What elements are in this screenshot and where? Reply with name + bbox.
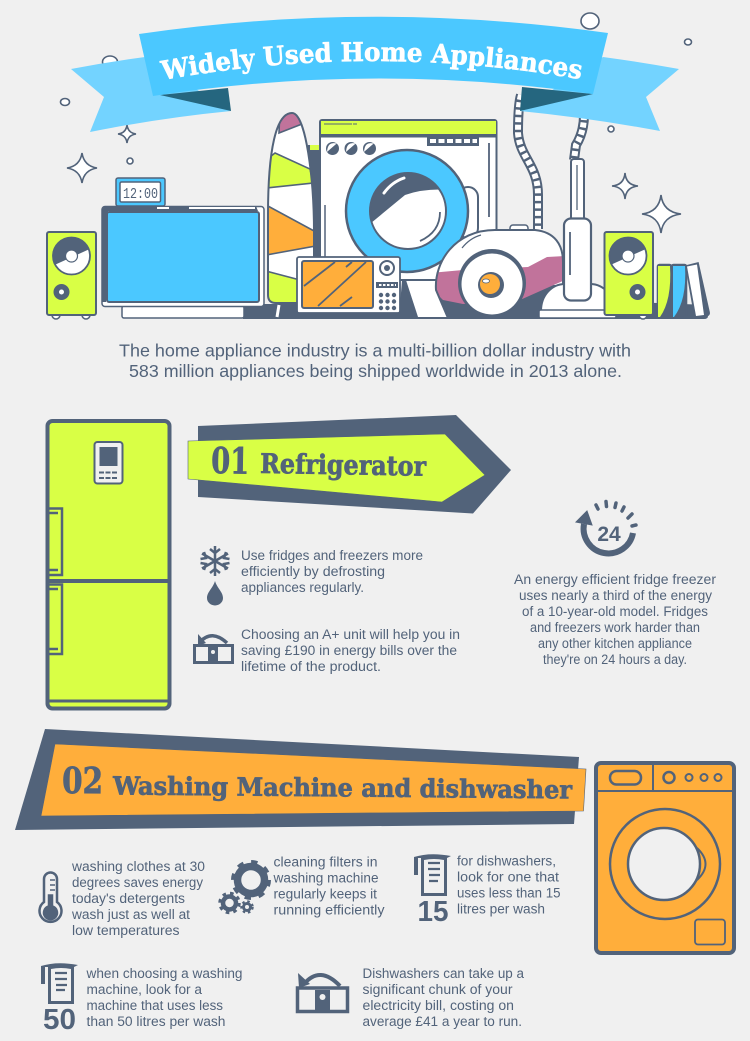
tip: washing at 30 degrees: low temperatures (72, 923, 180, 938)
tip: dishwasher electricity cost: Dishwashers can take up a (362, 966, 524, 981)
tip: washing at 30 degrees (71, 859, 205, 938)
fridge energy text: uses nearly a third of the energy (519, 588, 712, 603)
books (658, 263, 709, 318)
icon: snowflake (200, 546, 230, 576)
icon: 24 hours: 24 (597, 523, 621, 546)
icon: thermometer (40, 872, 62, 922)
icon: jug 50 litres: 50 (43, 1004, 76, 1036)
tip: dishwasher 15 litres (457, 854, 560, 916)
tip: cleaning filters: regularly keeps it (274, 886, 377, 902)
fridge tip: A+ unit: saving £190 in energy bills over the (241, 643, 457, 658)
section 02 title: 02 (62, 760, 103, 802)
fridge handles (49, 508, 62, 654)
section 01 heading ribbon (188, 415, 511, 514)
ironing board (266, 108, 322, 317)
left speaker (47, 232, 96, 319)
tip: cleaning filters: washing machine (272, 870, 378, 886)
fridge energy text (514, 572, 717, 667)
intro text: 583 million appliances being shipped worldwide in 2013 alone. (129, 361, 622, 381)
title text: Widely Used Home Appliances (159, 42, 582, 80)
fridge energy text: they're on 24 hours a day. (543, 652, 687, 667)
icon: jug 50 litres (41, 963, 78, 1036)
tip: dishwasher 15 litres: for dishwashers, (457, 854, 556, 868)
microwave (297, 257, 400, 313)
alarm clock (116, 178, 165, 206)
washing machine illustration (596, 763, 734, 953)
tip: cleaning filters: cleaning filters in (274, 854, 378, 870)
icon: money saving (194, 634, 232, 662)
icon: jug 15 litres (414, 854, 451, 928)
fridge display (94, 442, 122, 484)
icon: 24 hours (576, 502, 636, 553)
tip: washing machine 50 litres: machine that uses less (86, 998, 223, 1013)
vacuum cleaner (434, 224, 563, 317)
section 02 title: Washing Machine and dishwasher (112, 771, 573, 804)
tip: cleaning filters: running efficiently (274, 902, 385, 918)
fridge tip: defrost (241, 548, 423, 595)
fridge energy text: An energy efficient fridge freezer (514, 572, 717, 587)
fridge tip: defrost: efficiently by defrosting (241, 564, 385, 579)
fridge energy text: of a 10-year-old model. Fridges (522, 604, 708, 619)
icon: jug 15 litres: 15 (418, 896, 448, 928)
tip: dishwasher electricity cost: significant chunk of your (362, 982, 513, 997)
washing machine (320, 120, 497, 280)
section 02 heading ribbon (15, 729, 586, 830)
fridge energy text: any other kitchen appliance (538, 636, 692, 651)
fridge tip: A+ unit: lifetime of the product. (241, 659, 381, 674)
fridge energy text: and freezers work harder than (530, 620, 700, 635)
tip: dishwasher 15 litres: look for one that (457, 870, 559, 884)
section 01 title: 01 (211, 440, 250, 483)
alarm clock: 12:00 (123, 186, 158, 203)
fridge tip: defrost: Use fridges and freezers more (241, 548, 423, 563)
television (102, 206, 264, 318)
right speaker (604, 232, 653, 319)
section 01 title (211, 440, 427, 486)
dark floor (243, 270, 708, 319)
tip: dishwasher electricity cost: electricity bill, costing on (362, 998, 514, 1013)
fridge illustration (47, 421, 170, 708)
section 01 title: Refrigerator (260, 449, 427, 483)
tip: dishwasher electricity cost: average £41 a year to run. (362, 1014, 522, 1029)
tip: cleaning filters (272, 854, 385, 918)
tip: washing machine 50 litres (85, 966, 243, 1029)
tip: washing at 30 degrees: washing clothes at 30 (71, 859, 205, 874)
tip: washing machine 50 litres: when choosing a washing (85, 966, 243, 981)
icon: gears (220, 863, 268, 912)
title banner (71, 16, 679, 132)
tip: washing machine 50 litres: machine, look for a (86, 982, 202, 997)
tip: washing at 30 degrees: wash just as well at (71, 907, 190, 922)
icon: water drop (207, 581, 223, 606)
tip: washing machine 50 litres: than 50 litres per wash (86, 1014, 226, 1029)
tip: dishwasher 15 litres: litres per wash (457, 902, 545, 916)
intro text (119, 340, 631, 381)
tip: washing at 30 degrees: today's detergents (72, 891, 185, 906)
tip: washing at 30 degrees: degrees saves energy (72, 875, 203, 890)
fridge tip: A+ unit (241, 627, 460, 674)
section 02 title (62, 760, 573, 806)
tip: dishwasher electricity cost (362, 966, 524, 1029)
fridge tip: defrost: appliances regularly. (241, 580, 364, 595)
upright vacuum (539, 159, 616, 318)
vacuum hoses (518, 95, 584, 229)
intro text: The home appliance industry is a multi-billion dollar industry with (119, 340, 631, 360)
icon: money bill (298, 973, 348, 1012)
tip: dishwasher 15 litres: uses less than 15 (457, 886, 560, 900)
fridge tip: A+ unit: Choosing an A+ unit will help you in (241, 627, 460, 642)
illustration: home appliances group (47, 95, 709, 320)
decorative bubbles and sparkles (60, 13, 692, 233)
